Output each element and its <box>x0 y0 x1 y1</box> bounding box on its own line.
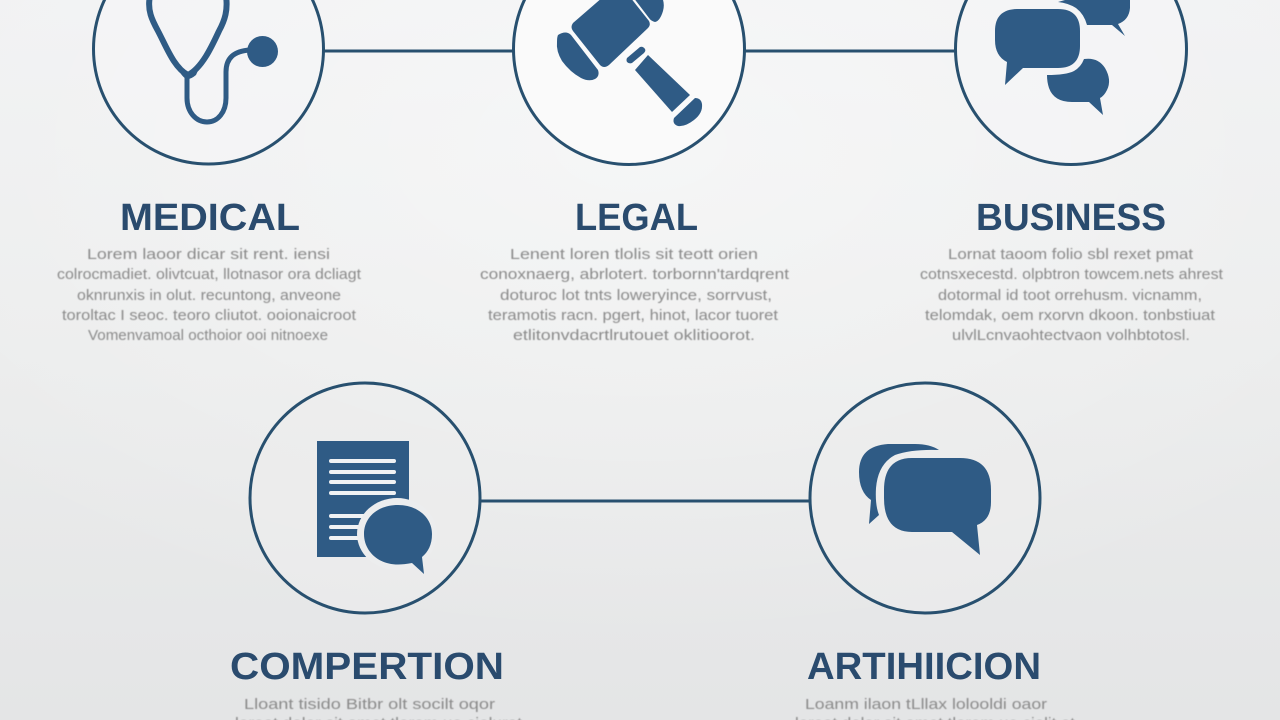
text block: legal: conoxnaerg, abrlotert. torbornn'tardqrent <box>480 266 790 283</box>
panel: legal <box>480 0 790 344</box>
heading: arbitration: ARTIHIICION <box>807 646 1041 688</box>
text block: business <box>920 246 1224 344</box>
text block: arbitration: Loanm ilaon tLllax lolooldi oaor <box>805 696 1047 713</box>
text block: medical: toroltac I seoc. teoro cliutot. ooionaicroot <box>62 307 357 324</box>
panel: medical <box>57 0 362 344</box>
icon: gavel <box>514 0 744 164</box>
icon: speech bubbles <box>956 0 1186 164</box>
icon: document with speech bubble <box>250 383 480 613</box>
text block: medical: Lorem laoor dicar sit rent. iensi <box>87 246 330 263</box>
heading: competition: COMPERTION <box>230 646 504 688</box>
text block: competition <box>235 696 523 720</box>
text block: medical <box>57 246 362 344</box>
text block: business: dotormal id toot orrehusm. vicnamm, <box>938 287 1202 304</box>
text block: competition: Lloant tisido Bitbr olt socilt oqor <box>244 696 495 713</box>
heading: business: BUSINESS <box>976 197 1166 239</box>
heading: medical: MEDICAL <box>120 197 300 239</box>
text block: legal: teramotis racn. pgert, hinot, lacor tuoret <box>488 307 779 324</box>
text block: medical: Vomenvamoal octhoior ooi nitnoexe <box>88 327 328 344</box>
text block: legal <box>480 246 790 344</box>
text block: business: ulvlLcnvaohtectvaon volhbtotosl. <box>952 327 1190 344</box>
text block: arbitration <box>795 696 1076 720</box>
text block: medical: colrocmadiet. olivtcuat, llotnasor ora dcliagt <box>57 266 362 283</box>
icon: stethoscope <box>94 0 324 164</box>
text block: business: Lornat taoom folio sbl rexet pmat <box>948 246 1194 263</box>
text block: legal: etlitonvdacrtlrutouet oklitioorot. <box>513 327 755 344</box>
panel: competition <box>230 383 523 720</box>
panel: arbitration <box>795 383 1076 720</box>
panel: business <box>920 0 1224 344</box>
text block: legal: Lenent loren tlolis sit teott orien <box>510 246 758 263</box>
text block: business: telomdak, oem rxorvn dkoon. tonbstiuat <box>925 307 1216 324</box>
icon: overlapping speech bubbles <box>810 383 1040 613</box>
text block: business: cotnsxecestd. olpbtron towcem.nets ahrest <box>920 266 1224 283</box>
text block: medical: oknrunxis in olut. recuntong, anveone <box>77 287 341 304</box>
heading: legal: LEGAL <box>575 197 698 239</box>
text block: legal: doturoc lot tnts loweryince, sorrvust, <box>500 287 772 304</box>
